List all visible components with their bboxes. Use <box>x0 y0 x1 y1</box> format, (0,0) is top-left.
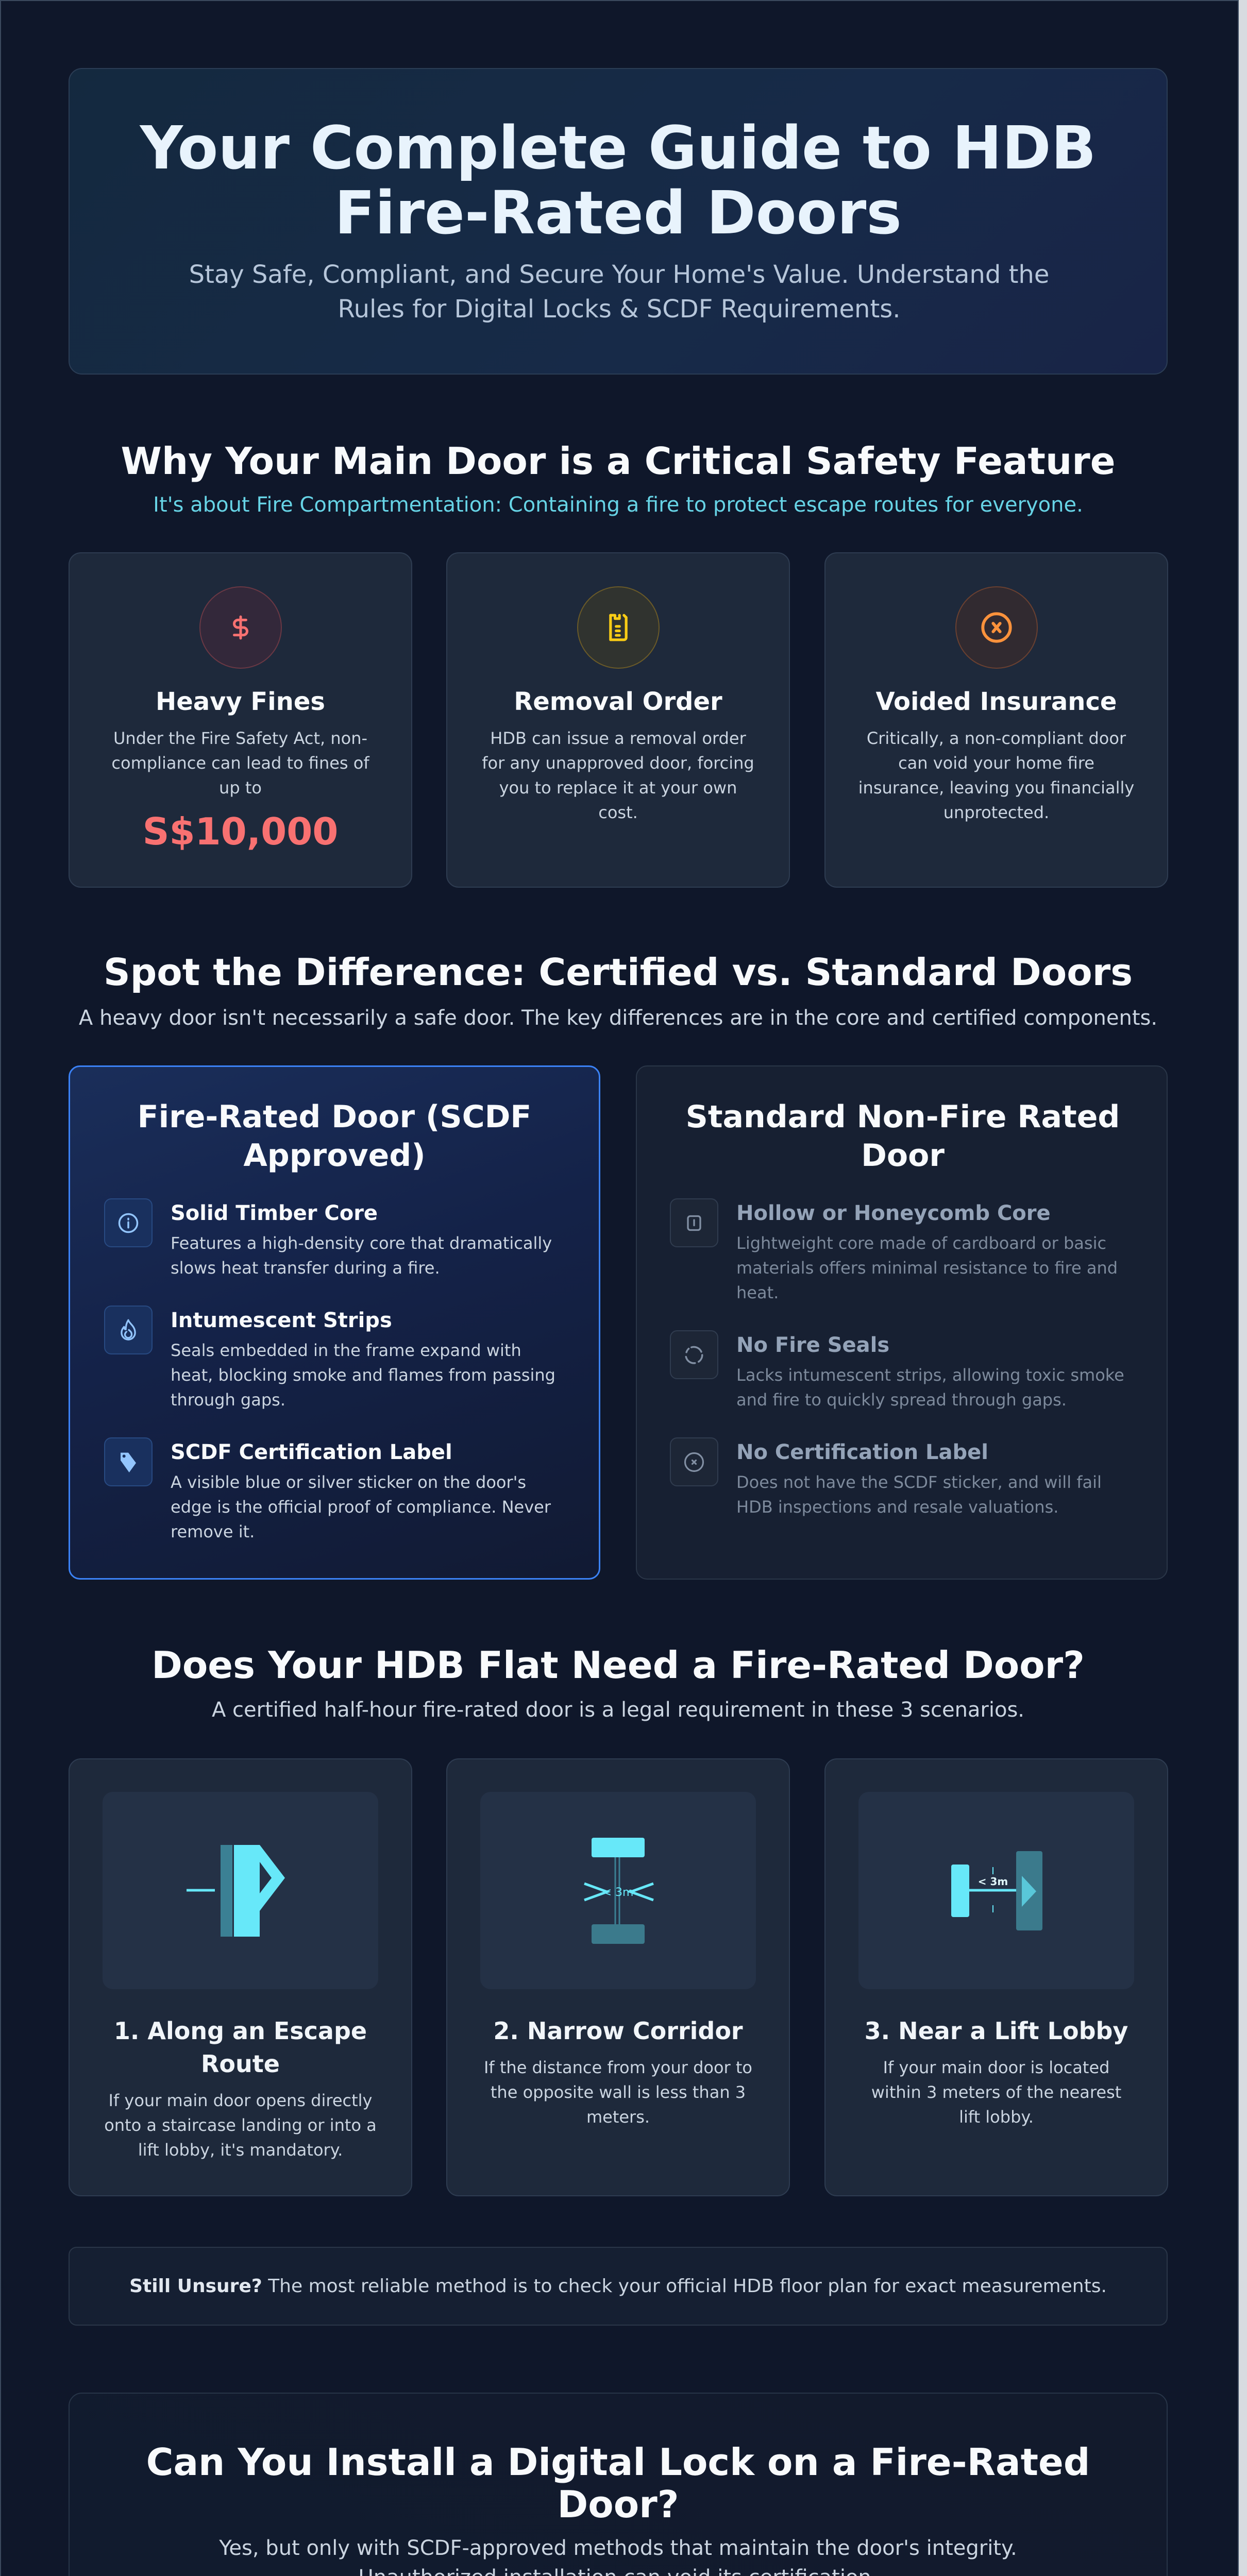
icon: circle x <box>955 586 1038 669</box>
subheading: fire compartmentation: It's about Fire Compartmentation: Containing a fire to protect escape routes for everyone. <box>153 493 1083 517</box>
card: lift lobby <box>824 1758 1168 2196</box>
subheading: A heavy door isn't necessarily a safe door. The key differences are in the core and certified components. <box>79 1006 1157 1030</box>
card text: If the distance from your door to the opposite wall is less than 3 meters. <box>484 2058 752 2127</box>
panel title: Door? <box>558 2483 679 2526</box>
panel title: Can You Install a Digital Lock on a Fire-Rated <box>146 2441 1090 2484</box>
illustration: door on escape route <box>103 1792 378 1989</box>
card title: 1. Along an Escape Route <box>114 2017 367 2078</box>
card text: If your main door opens directly onto a staircase landing or into a lift lobby, it's mandatory. <box>104 2091 377 2160</box>
icon: hollow box <box>670 1198 718 1247</box>
item: no certification <box>670 1437 1102 1517</box>
card: removal order <box>446 552 790 888</box>
card title: Voided Insurance <box>876 687 1117 716</box>
header panel <box>69 68 1168 375</box>
panel: fire-rated door <box>69 1065 600 1580</box>
item: no fire seals: Lacks intumescent strips, allowing toxic smoke and fire to quickly spread through gaps. <box>736 1365 1124 1410</box>
main title <box>139 114 1096 248</box>
icon: clipboard <box>577 586 660 669</box>
panel title <box>686 1099 1120 1174</box>
card: narrow corridor <box>446 1758 790 2196</box>
panel title: Approved) <box>243 1138 426 1174</box>
panel: digital lock <box>69 2393 1168 2576</box>
item: scdf label: SCDF Certification Label <box>171 1440 452 1464</box>
card title: Heavy Fines <box>156 687 325 716</box>
icon: flame <box>104 1306 153 1354</box>
illustration: corridor width <box>480 1792 756 1989</box>
panel title: Door <box>861 1138 945 1174</box>
card text: If your main door is located within 3 meters of the nearest lift lobby. <box>871 2058 1121 2127</box>
card: escape route <box>69 1758 412 2196</box>
item: scdf label <box>104 1437 551 1541</box>
card: heavy fines <box>69 552 412 888</box>
item: solid timber core: Features a high-density core that dramatically slows heat transfer during a fire. <box>171 1233 552 1278</box>
item: no certification: Does not have the SCDF sticker, and will fail HDB inspections and resale valuations. <box>736 1472 1102 1517</box>
item: hollow core <box>670 1198 1118 1302</box>
item: no fire seals <box>670 1330 1124 1410</box>
card text: Under the Fire Safety Act, non-compliance can lead to fines of up to <box>111 728 369 798</box>
panel title <box>138 1099 531 1174</box>
item: no fire seals: No Fire Seals <box>736 1333 889 1357</box>
subheading: A certified half-hour fire-rated door is a legal requirement in these 3 scenarios. <box>212 1698 1024 1722</box>
icon: dollar <box>199 586 281 669</box>
item: intumescent strips <box>104 1306 555 1410</box>
panel title: Fire-Rated Door (SCDF <box>138 1099 531 1135</box>
icon: tag <box>104 1437 153 1486</box>
card title: Removal Order <box>514 687 722 716</box>
illustration: corridor width: < 3m <box>602 1886 633 1899</box>
item: scdf label: A visible blue or silver sticker on the door's edge is the official proof of compliance. Never remove it. <box>171 1472 551 1541</box>
panel title <box>146 2441 1090 2526</box>
icon: broken circle <box>670 1330 718 1379</box>
panel subtitle <box>219 2536 1017 2576</box>
item: hollow core: Hollow or Honeycomb Core <box>736 1201 1051 1225</box>
card text: HDB can issue a removal order for any unapproved door, forcing you to replace it at your own cost. <box>482 728 754 822</box>
heading: why main door: Why Your Main Door is a Critical Safety Feature <box>121 439 1116 483</box>
callout: still unsure <box>69 2247 1168 2326</box>
panel subtitle: Yes, but only with SCDF-approved methods that maintain the door's integrity. <box>219 2536 1017 2560</box>
card: voided insurance <box>824 552 1168 888</box>
panel title: Standard Non-Fire Rated <box>686 1099 1120 1135</box>
icon: info circle <box>104 1198 153 1247</box>
fine amount: S$10,000 <box>143 810 338 853</box>
callout: still unsure: Still Unsure? The most reliable method is to check your official HDB floor plan for exact measurements. <box>129 2276 1107 2297</box>
panel: standard door <box>636 1065 1168 1580</box>
heading: spot the difference: Spot the Difference: Certified vs. Standard Doors <box>104 951 1133 994</box>
item: intumescent strips: Seals embedded in the frame expand with heat, blocking smoke and flames from passing through gaps. <box>171 1341 555 1410</box>
heading: does your flat need: Does Your HDB Flat Need a Fire-Rated Door? <box>151 1643 1085 1687</box>
illustration: near lift: < 3m <box>978 1875 1008 1888</box>
card text: Critically, a non-compliant door can void your home fire insurance, leaving you financially unprotected. <box>858 728 1134 822</box>
item: no certification: No Certification Label <box>736 1440 988 1464</box>
card title: 3. Near a Lift Lobby <box>865 2017 1128 2045</box>
main title: Fire-Rated Doors <box>334 179 902 248</box>
item: hollow core: Lightweight core made of cardboard or basic materials offers minimal resistance to fire and heat. <box>736 1233 1118 1302</box>
header subtitle: Stay Safe, Compliant, and Secure Your Home's Value. Understand the Rules for Digital Locks & SCDF Requirements. <box>189 260 1049 324</box>
illustration: near lift <box>858 1792 1134 1989</box>
item: solid timber core <box>104 1198 552 1278</box>
icon: circle x <box>670 1437 718 1486</box>
item: intumescent strips: Intumescent Strips <box>171 1309 392 1332</box>
main title: Your Complete Guide to HDB <box>140 114 1096 183</box>
card title: 2. Narrow Corridor <box>493 2017 743 2045</box>
item: solid timber core: Solid Timber Core <box>171 1201 378 1225</box>
